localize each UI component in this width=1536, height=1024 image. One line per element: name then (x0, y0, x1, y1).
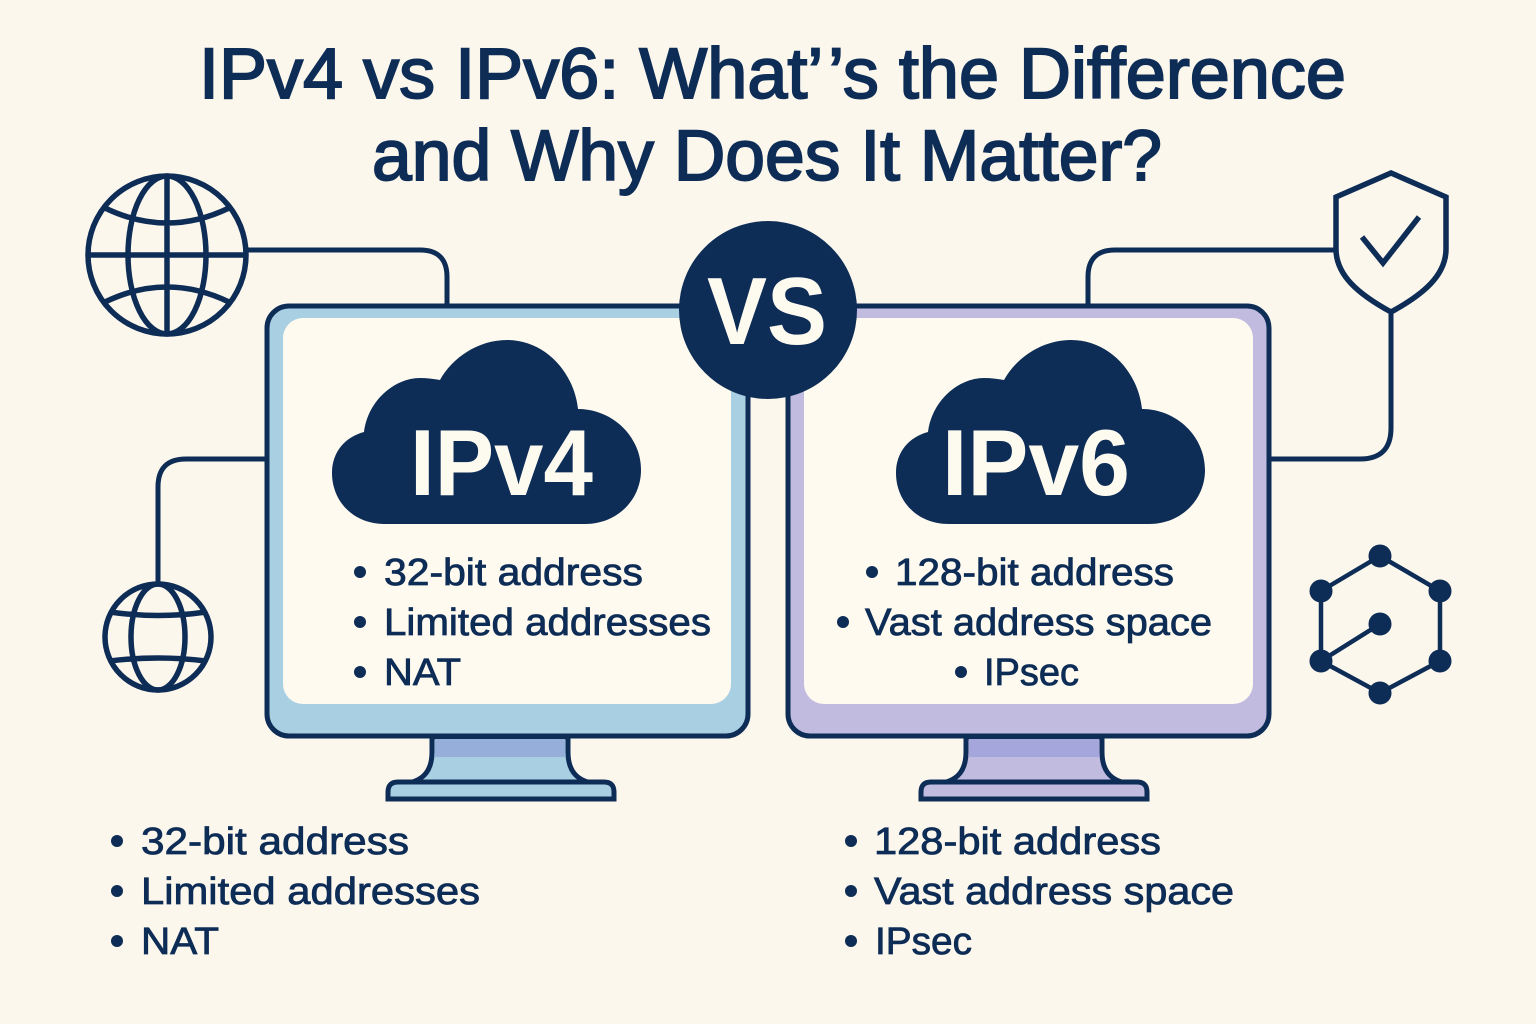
list: IPv4 screen (354, 552, 711, 694)
connector: large globe to IPv4 monitor (246, 250, 447, 304)
list: IPv6 screen (837, 552, 1212, 694)
cloud: IPv4: IPv4 (410, 410, 593, 515)
cloud: IPv4 (332, 340, 641, 524)
title: and Why Does It Matter? (372, 117, 1162, 196)
icon: shield with check (1336, 173, 1446, 312)
monitor stand: IPv6 (921, 737, 1147, 799)
title: IPv4 vs IPv6: What’’s the Difference (199, 35, 1346, 114)
cloud: IPv6: IPv6 (942, 410, 1130, 515)
list: IPv6 summary: 128-bit address (874, 821, 1161, 863)
list: IPv4 summary: Limited addresses (141, 871, 480, 913)
panel: IPv4 monitor (267, 306, 748, 799)
list: IPv4 screen: 32-bit address (384, 552, 643, 594)
monitor frame: IPv4 (267, 306, 748, 736)
list: IPv4 screen: NAT (384, 652, 461, 694)
icon: hexagon network (1310, 545, 1451, 704)
VS badge (679, 221, 857, 399)
icon: large globe (88, 176, 246, 334)
list: IPv6 screen: IPsec (984, 652, 1079, 694)
list: IPv4 screen: Limited addresses (384, 602, 711, 644)
connector: shield to IPv6 monitor lower (1270, 310, 1391, 459)
list: IPv4 summary (111, 821, 480, 963)
icon: small globe (105, 584, 211, 690)
panel: IPv6 monitor (788, 306, 1269, 799)
monitor frame: IPv6 (788, 306, 1269, 736)
monitor stand: IPv4 (388, 737, 614, 799)
screen: IPv4 (283, 318, 731, 704)
connector: small globe to IPv4 monitor (158, 459, 266, 584)
list: IPv4 summary: NAT (141, 921, 219, 963)
list: IPv6 summary: Vast address space (874, 871, 1234, 913)
list: IPv6 summary (845, 821, 1234, 963)
VS badge: VS (707, 258, 827, 365)
list: IPv4 summary: 32-bit address (141, 821, 409, 863)
cloud: IPv6 (896, 340, 1205, 524)
list: IPv6 screen: 128-bit address (895, 552, 1174, 594)
list: IPv6 summary: IPsec (875, 921, 972, 963)
title (199, 35, 1346, 196)
connector: shield to IPv6 monitor (1088, 250, 1336, 304)
screen: IPv6 (804, 318, 1253, 704)
list: IPv6 screen: Vast address space (865, 602, 1212, 644)
